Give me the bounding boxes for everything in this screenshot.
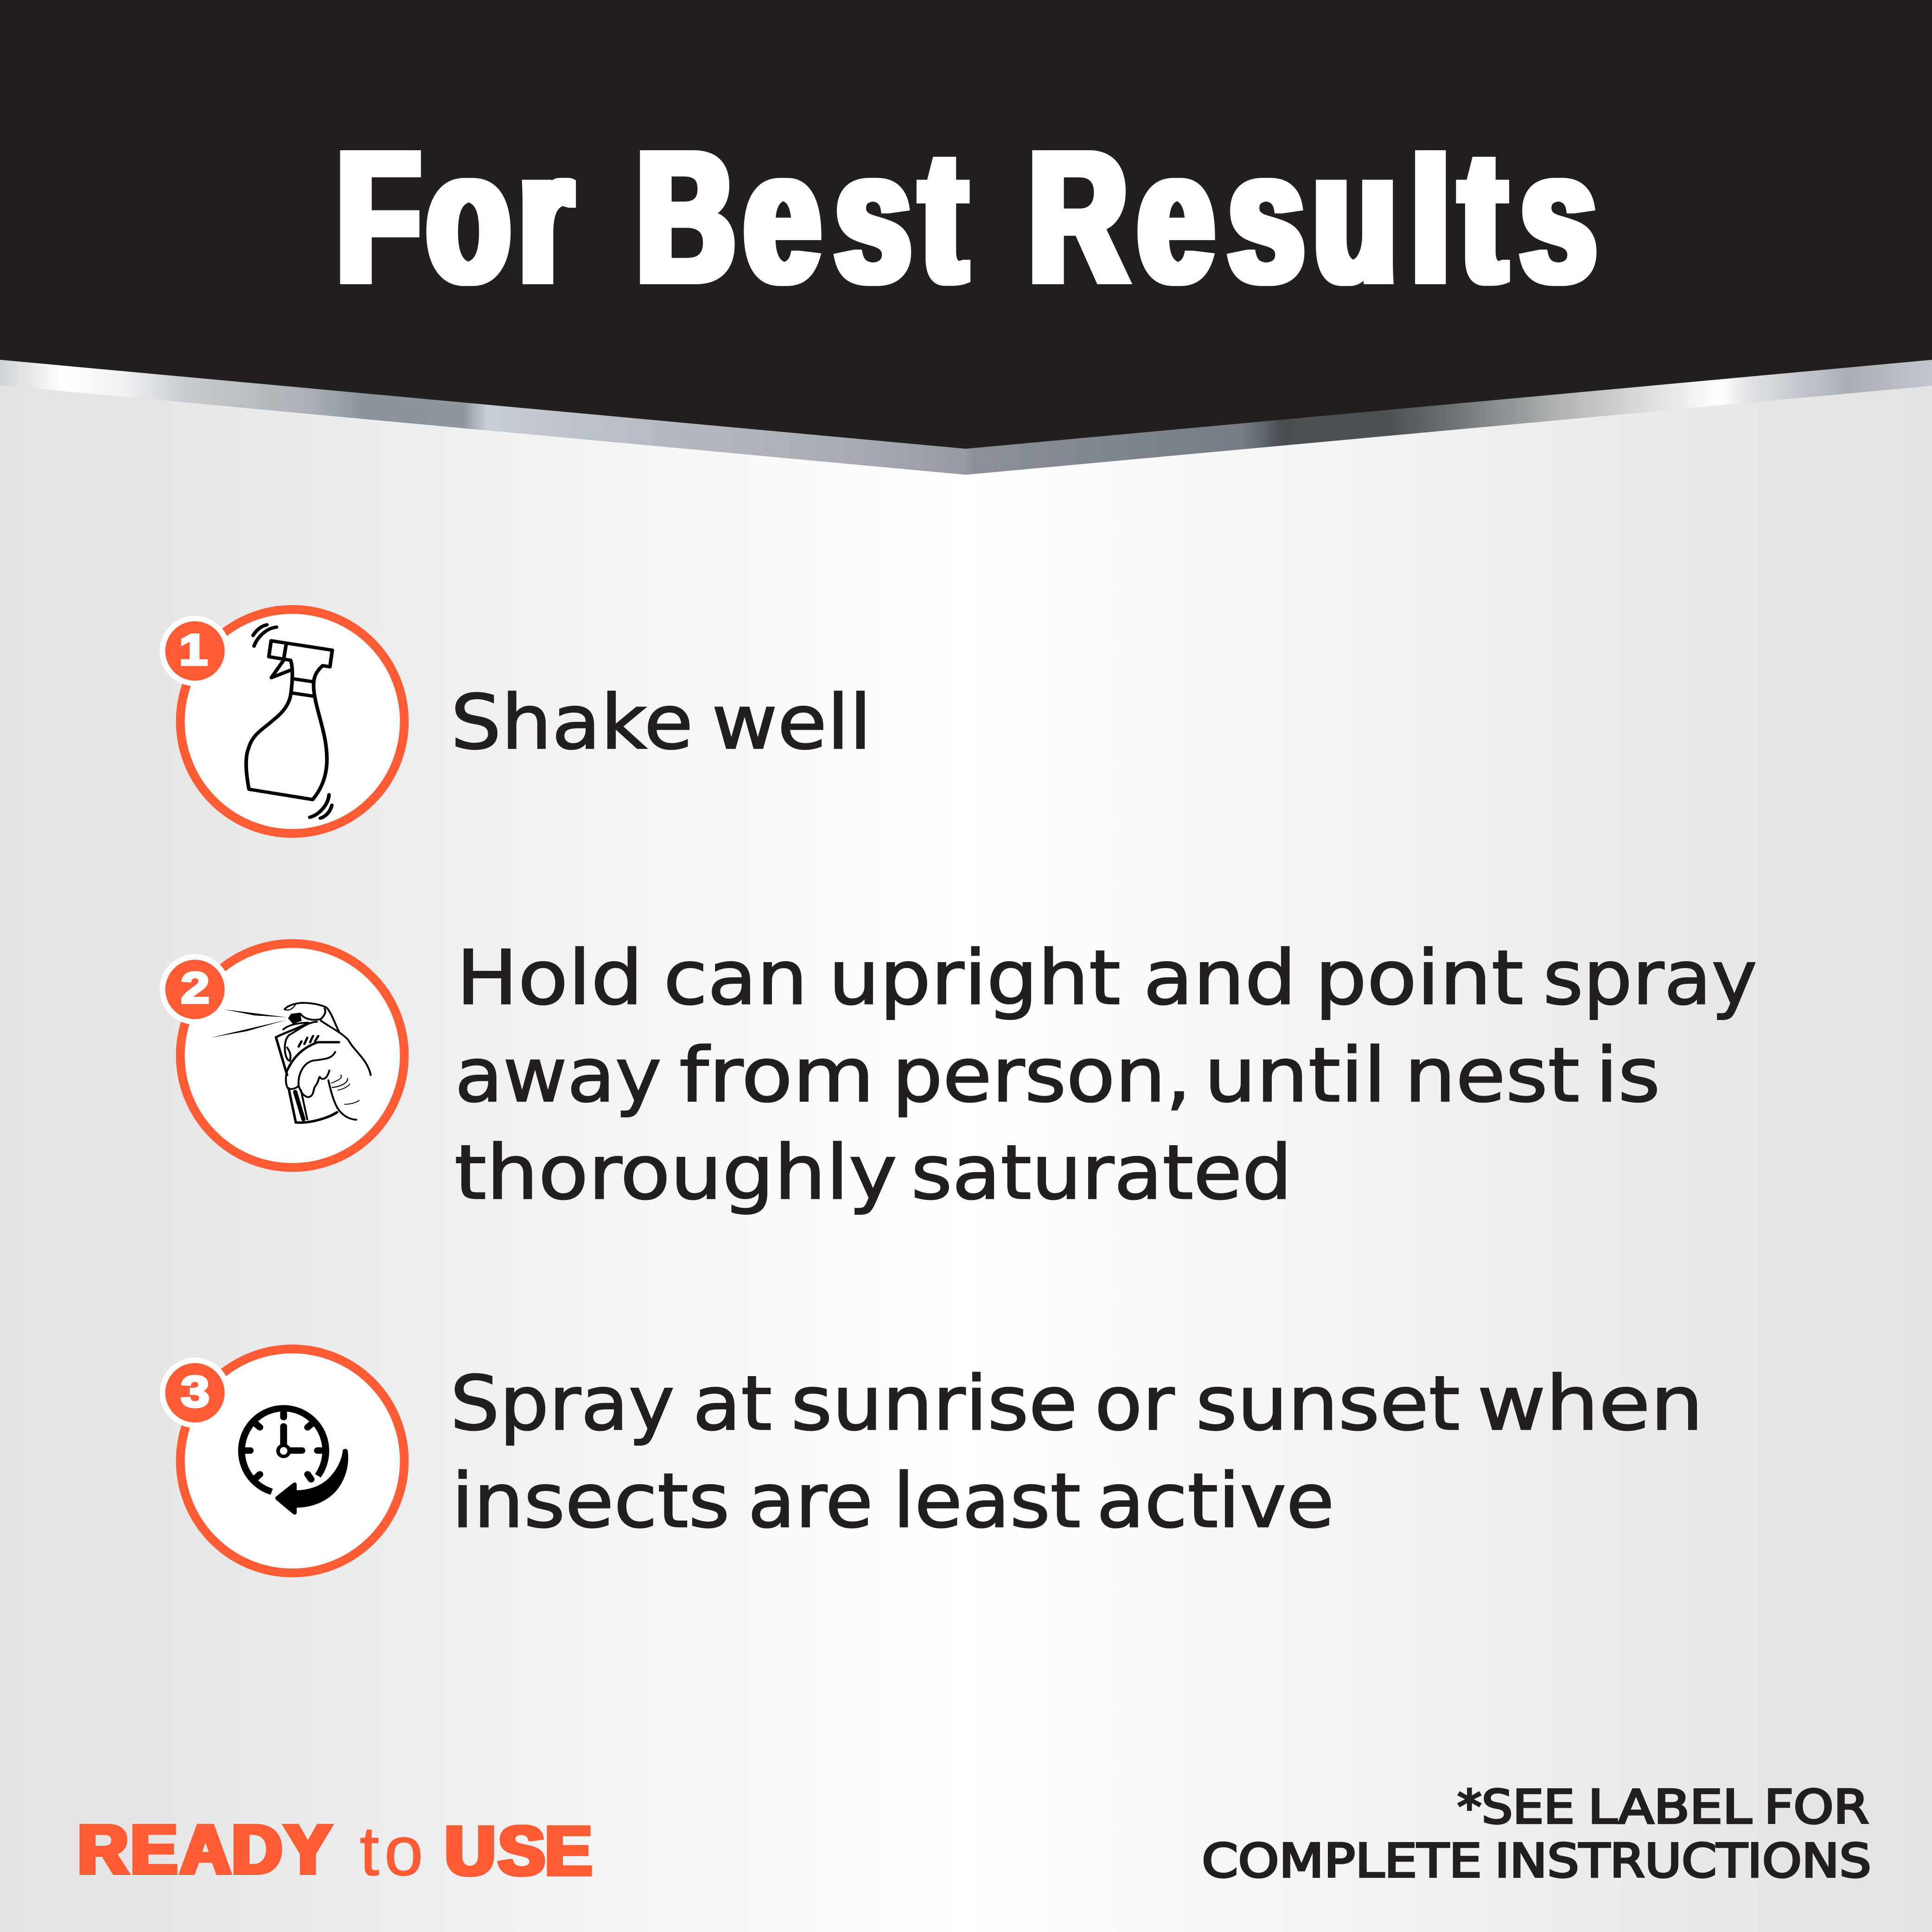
badge 2 — [162, 957, 227, 1022]
footnote: LABEL — [1588, 1780, 1752, 1834]
step 3 circle — [180, 1349, 404, 1573]
step 2 text: and — [1143, 935, 1296, 1022]
metallic chevron band — [0, 359, 1932, 475]
step 1 panel — [162, 609, 404, 834]
step 3 text: Spray — [450, 1360, 675, 1447]
icon: hand spraying can — [210, 1003, 371, 1122]
step 2 text: upright — [829, 935, 1121, 1022]
step 1 text: Shake — [451, 679, 693, 766]
badge 2: 2 — [181, 963, 210, 1013]
step 1 text: well — [712, 679, 872, 766]
step 3 text: are — [748, 1458, 873, 1545]
step 2 text: thoroughly — [454, 1129, 897, 1217]
step 2 circle — [180, 944, 404, 1167]
ready to use tagline: READY — [78, 1810, 331, 1888]
step 3 panel — [162, 1349, 404, 1573]
step 1 text — [451, 679, 872, 766]
step 2 text: person, — [892, 1032, 1191, 1119]
step 2 text: spray — [1543, 935, 1757, 1022]
footnote: COMPLETE — [1202, 1834, 1482, 1888]
badge 3: 3 — [181, 1367, 210, 1416]
header panel — [0, 0, 1932, 449]
step 2 text: until — [1204, 1032, 1386, 1119]
step 2 panel — [162, 944, 404, 1167]
ready to use tagline: USE — [445, 1812, 592, 1890]
step 2 text: away — [455, 1032, 662, 1119]
ready to use tagline — [78, 1810, 592, 1890]
step 3 text: or — [1095, 1360, 1174, 1447]
step 2 text: point — [1315, 935, 1524, 1022]
footnote — [1202, 1780, 1871, 1888]
step 2 text: can — [663, 935, 808, 1022]
ready to use tagline: to — [360, 1812, 423, 1890]
icon: clock with back arrow — [242, 1408, 348, 1515]
step 3 text: at — [693, 1360, 772, 1447]
badge 3 — [162, 1360, 227, 1425]
badge 1 — [162, 618, 227, 683]
icon: shaking spray bottle — [246, 625, 332, 818]
footnote: *SEE — [1457, 1780, 1575, 1834]
step 3 text: least — [893, 1458, 1081, 1545]
step 3 text: when — [1477, 1360, 1703, 1447]
step 2 text — [454, 935, 1757, 1217]
step 3 text: insects — [452, 1458, 730, 1545]
footnote: INSTRUCTIONS — [1495, 1834, 1871, 1888]
step 2 text: is — [1595, 1032, 1660, 1119]
step 1 circle — [180, 609, 404, 834]
step 2 text: Hold — [456, 935, 643, 1022]
step 3 text: sunrise — [791, 1360, 1078, 1447]
step 2 text: saturated — [911, 1129, 1292, 1217]
badge 1: 1 — [179, 625, 208, 675]
title: For Best Results — [337, 114, 1596, 321]
step 2 text: from — [679, 1032, 874, 1119]
footnote: FOR — [1764, 1780, 1869, 1834]
step 2 text: nest — [1404, 1032, 1580, 1119]
step 3 text: sunset — [1196, 1360, 1460, 1447]
step 3 text — [450, 1360, 1703, 1545]
step 3 text: active — [1097, 1458, 1334, 1545]
